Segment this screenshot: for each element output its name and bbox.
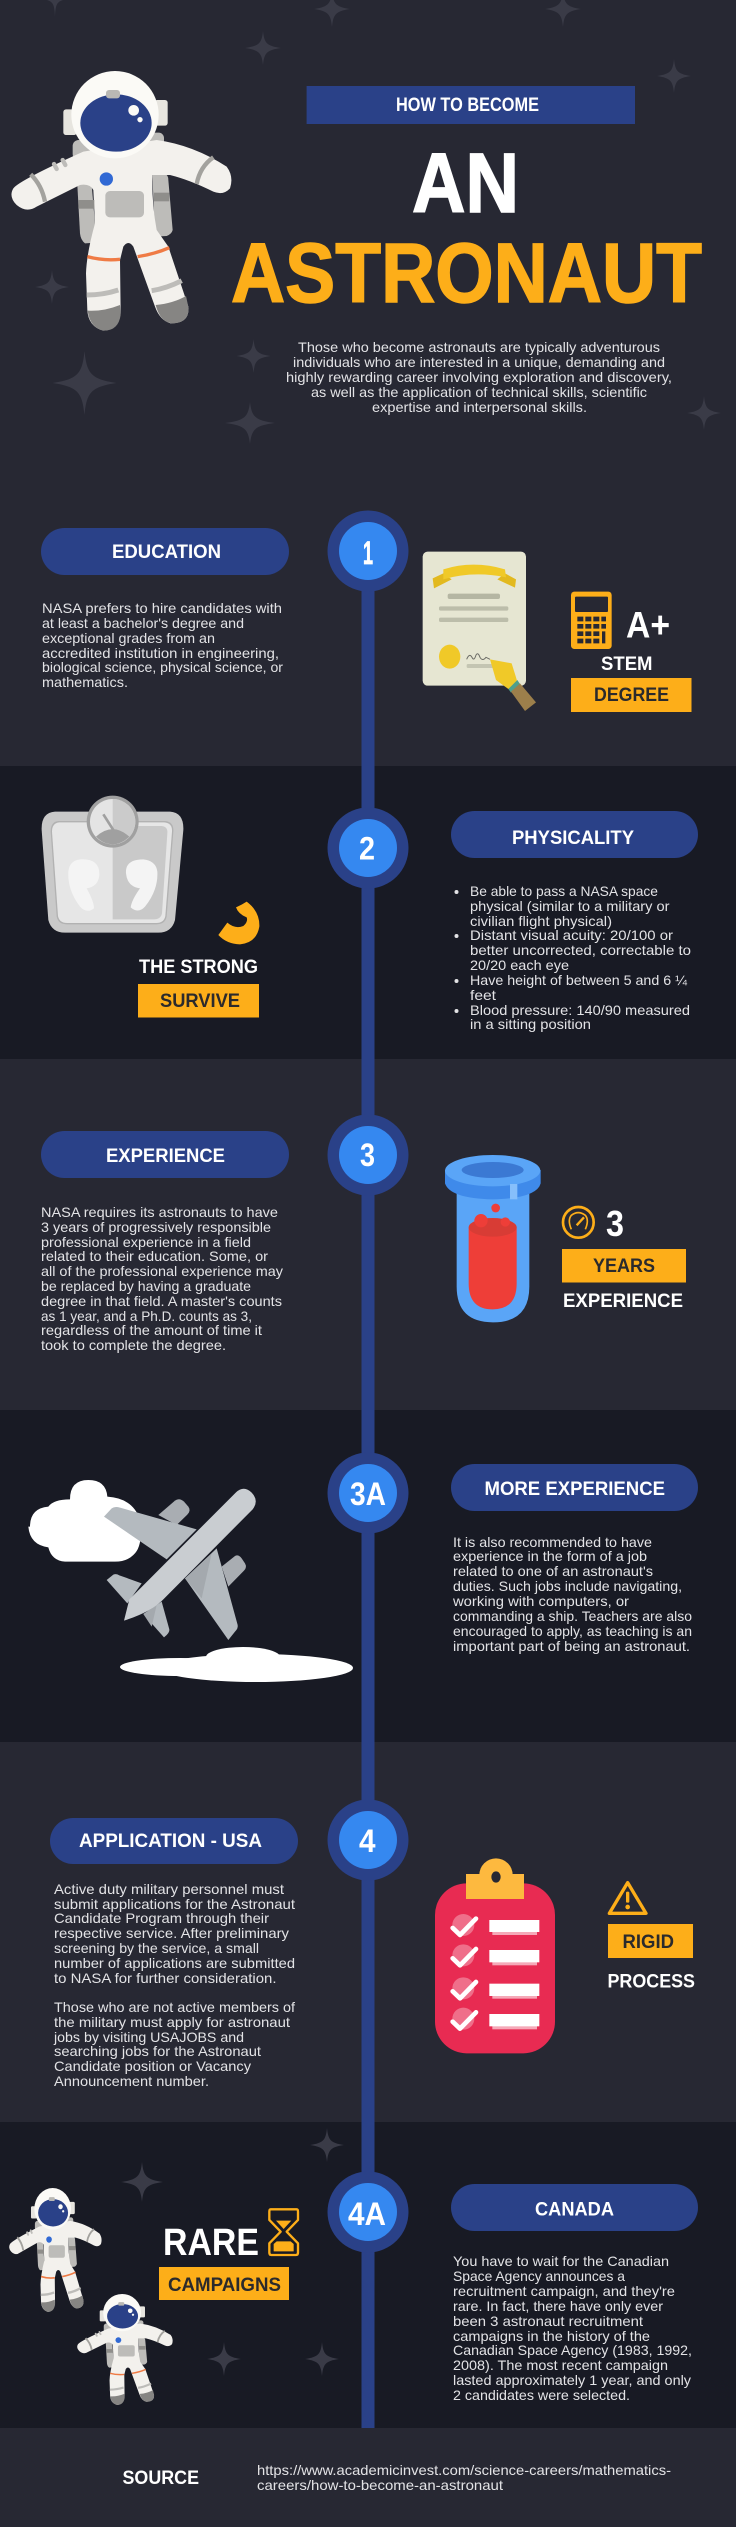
icon: cloud — [28, 1480, 141, 1562]
footer: source url — [257, 2462, 671, 2493]
label: degree: DEGREE — [594, 685, 669, 706]
icon: airplane — [104, 1489, 256, 1640]
text: canada: recruitment campaign, and they're — [453, 2283, 675, 2299]
step marker 3 — [328, 1114, 408, 1196]
stars: canada section — [121, 2128, 344, 2376]
icon: flexed arm — [218, 902, 259, 944]
heading: canada: CANADA — [535, 2200, 614, 2220]
text: more experience: duties. Such jobs include navigating, — [453, 1578, 682, 1594]
label: rigid: RIGID — [622, 1932, 674, 1953]
text: experience: all of the professional experience may — [41, 1263, 283, 1279]
icon: weighing scale — [42, 796, 183, 933]
text: canada: 2008). The most recent campaign — [453, 2357, 668, 2373]
text: canada — [453, 2253, 692, 2403]
label: experience: EXPERIENCE — [563, 1291, 683, 1312]
text: application usa: submit applications for the Astronaut — [54, 1896, 295, 1912]
list: physicality: Distant visual acuity: 20/100 or — [470, 927, 673, 943]
text: education: at least a bachelor's degree and — [42, 615, 244, 631]
text: experience: regardless of the amount of time it — [41, 1322, 262, 1338]
icon: clipboard checklist — [435, 1858, 555, 2053]
label: survive: SURVIVE — [160, 991, 240, 1012]
heading: application usa: APPLICATION - USA — [79, 1831, 262, 1852]
step marker 3A: 3A — [350, 1476, 386, 1512]
label: 3: 3 — [606, 1203, 624, 1244]
text: education — [42, 600, 283, 690]
icon: astronaut small 1 — [9, 2188, 102, 2312]
list: physicality: physical (similar to a military or — [470, 898, 670, 914]
icon: astronaut small 2 — [77, 2294, 173, 2405]
label: years: YEARS — [593, 1256, 655, 1277]
list: physicality — [454, 883, 691, 1032]
text: more experience — [452, 1534, 692, 1654]
intro paragraph: expertise and interpersonal skills. — [372, 399, 587, 415]
text: canada: lasted approximately 1 year, and only — [453, 2372, 691, 2388]
text: application usa: number of applications are submitted — [54, 1955, 295, 1971]
step marker 4: 4 — [359, 1823, 376, 1859]
icon: gauge — [563, 1207, 594, 1238]
text: canada: You have to wait for the Canadian — [453, 2253, 669, 2269]
text: canada: been 3 astronaut recruitment — [453, 2313, 643, 2329]
text: education: mathematics. — [42, 674, 128, 690]
step marker 2 — [328, 808, 408, 888]
text: more experience: important part of being an astronaut. — [453, 1638, 690, 1654]
text: experience: be replaced by having a graduate — [41, 1278, 251, 1294]
icon: astronaut — [11, 71, 231, 331]
intro paragraph: as well as the application of technical skills, scientific — [311, 384, 647, 400]
heading: physicality: PHYSICALITY — [512, 828, 634, 849]
text: canada: 2 candidates were selected. — [453, 2387, 630, 2403]
text: application usa: screening by the service, a small — [54, 1940, 259, 1956]
section background: canada — [0, 2122, 736, 2428]
text: education: accredited institution in engineering, — [42, 645, 279, 661]
icon: ground cloud — [120, 1647, 353, 1682]
step marker 1: 1 — [363, 535, 373, 571]
header banner: HOW TO BECOME — [396, 95, 539, 116]
text: application usa: Active duty military personnel must — [54, 1881, 284, 1897]
label: A+: A+ — [626, 604, 670, 646]
text: experience: as 1 year, and a Ph.D. counts as 3, — [41, 1308, 252, 1324]
text: more experience: working with computers, or — [452, 1593, 629, 1609]
text: application usa: respective service. After preliminary — [54, 1925, 289, 1941]
step marker 4A — [328, 2172, 408, 2252]
title: AN: AN — [412, 136, 519, 230]
footer: source url: careers/how-to-become-an-astronaut — [257, 2477, 503, 2493]
text: more experience: It is also recommended to have — [453, 1534, 652, 1550]
label: process: PROCESS — [608, 1972, 695, 1992]
section background: more experience — [0, 1410, 736, 1742]
text: experience: NASA requires its astronauts to have — [41, 1204, 278, 1220]
text: experience: took to complete the degree. — [41, 1337, 226, 1353]
step marker 4 — [328, 1800, 408, 1880]
heading: education: EDUCATION — [112, 542, 221, 563]
intro paragraph: Those who become astronauts are typically adventurous — [298, 339, 660, 355]
step marker 3A — [328, 1452, 408, 1534]
heading: experience — [41, 1131, 289, 1178]
text: more experience: encouraged to apply, as teaching is an — [453, 1623, 692, 1639]
list: physicality: 20/20 each eye — [470, 957, 569, 973]
label: the strong: THE STRONG — [139, 957, 258, 978]
list: physicality: civilian flight physical) — [470, 913, 612, 929]
icon: diploma — [423, 552, 536, 711]
text: experience: 3 years of progressively responsible — [41, 1219, 271, 1235]
heading: physicality — [451, 811, 698, 858]
text: education: exceptional grades from an — [42, 630, 215, 646]
label: rigid — [608, 1924, 693, 1958]
text: education: NASA prefers to hire candidates with — [42, 600, 282, 616]
heading: more experience — [451, 1464, 698, 1511]
text: application usa: searching jobs for the Astronaut — [54, 2043, 261, 2059]
text: canada: campaigns in the history of the — [453, 2328, 650, 2344]
label: years — [562, 1249, 686, 1282]
label: campaigns — [159, 2267, 289, 2300]
intro paragraph: highly rewarding career involving exploration and discovery, — [286, 369, 672, 385]
icon: test tube — [445, 1155, 541, 1322]
text: application usa: the military must apply for astronaut — [54, 2014, 290, 2030]
heading: more experience: MORE EXPERIENCE — [484, 1479, 665, 1500]
step marker 2: 2 — [359, 830, 375, 866]
list: physicality: Be able to pass a NASA space — [470, 883, 658, 899]
header banner — [307, 86, 635, 124]
text: experience: professional experience in a field — [41, 1234, 251, 1250]
label: STEM: STEM — [601, 654, 652, 675]
text: more experience: experience in the form of a job — [453, 1548, 647, 1564]
text: experience — [41, 1204, 283, 1353]
intro paragraph — [286, 339, 672, 415]
text: application usa — [53, 1881, 295, 2089]
heading: canada — [451, 2184, 698, 2231]
label: degree — [571, 678, 692, 712]
stars: header — [35, 0, 721, 444]
label: campaigns: CAMPAIGNS — [168, 2275, 281, 2296]
text: more experience: related to one of an astronaut's — [453, 1563, 653, 1579]
list: physicality: in a sitting position — [470, 1016, 591, 1032]
text: experience: related to their education. Some, or — [41, 1248, 268, 1264]
list: physicality: Blood pressure: 140/90 measured — [470, 1002, 690, 1018]
section background: physicality — [0, 766, 736, 1059]
label: rare: RARE — [163, 2222, 259, 2264]
list: physicality: better uncorrected, correctable to — [470, 942, 691, 958]
text: more experience: commanding a ship. Teachers are also — [453, 1608, 692, 1624]
text: application usa: Those who are not active members of — [54, 1999, 295, 2015]
text: application usa: jobs by visiting USAJOBS and — [53, 2029, 244, 2045]
icon: hourglass — [269, 2209, 298, 2255]
intro paragraph: individuals who are interested in a unique, demanding and — [293, 354, 665, 370]
heading: experience: EXPERIENCE — [106, 1146, 225, 1167]
text: education: biological science, physical science, or — [42, 659, 283, 675]
heading: education — [41, 528, 289, 575]
step marker 1 — [328, 510, 408, 592]
text: application usa: Candidate Program through their — [54, 1910, 269, 1926]
step marker 3: 3 — [360, 1137, 375, 1173]
list: physicality: Have height of between 5 and 6 ¼ — [470, 972, 687, 988]
footer: source url: https://www.academicinvest.com/science-careers/mathematics- — [257, 2462, 671, 2478]
text: application usa: Announcement number. — [54, 2073, 209, 2089]
text: application usa: Candidate position or Vacancy — [54, 2058, 251, 2074]
text: experience: degree in that field. A master's counts — [41, 1293, 282, 1309]
text: canada: Space Agency announces a — [453, 2268, 625, 2284]
heading: application usa — [50, 1818, 298, 1864]
icon: calculator — [571, 592, 612, 649]
step marker 4A: 4A — [348, 2196, 386, 2232]
text: canada: rare. In fact, there have only ever — [453, 2298, 663, 2314]
text: canada: Canadian Space Agency (1983, 1992, — [453, 2342, 692, 2358]
icon: warning triangle — [609, 1883, 646, 1913]
list: physicality: feet — [470, 987, 496, 1003]
label: survive — [138, 984, 259, 1018]
timeline line — [362, 560, 374, 2428]
footer: source label: SOURCE — [122, 2468, 199, 2489]
text: application usa: to NASA for further consideration. — [54, 1970, 276, 1986]
